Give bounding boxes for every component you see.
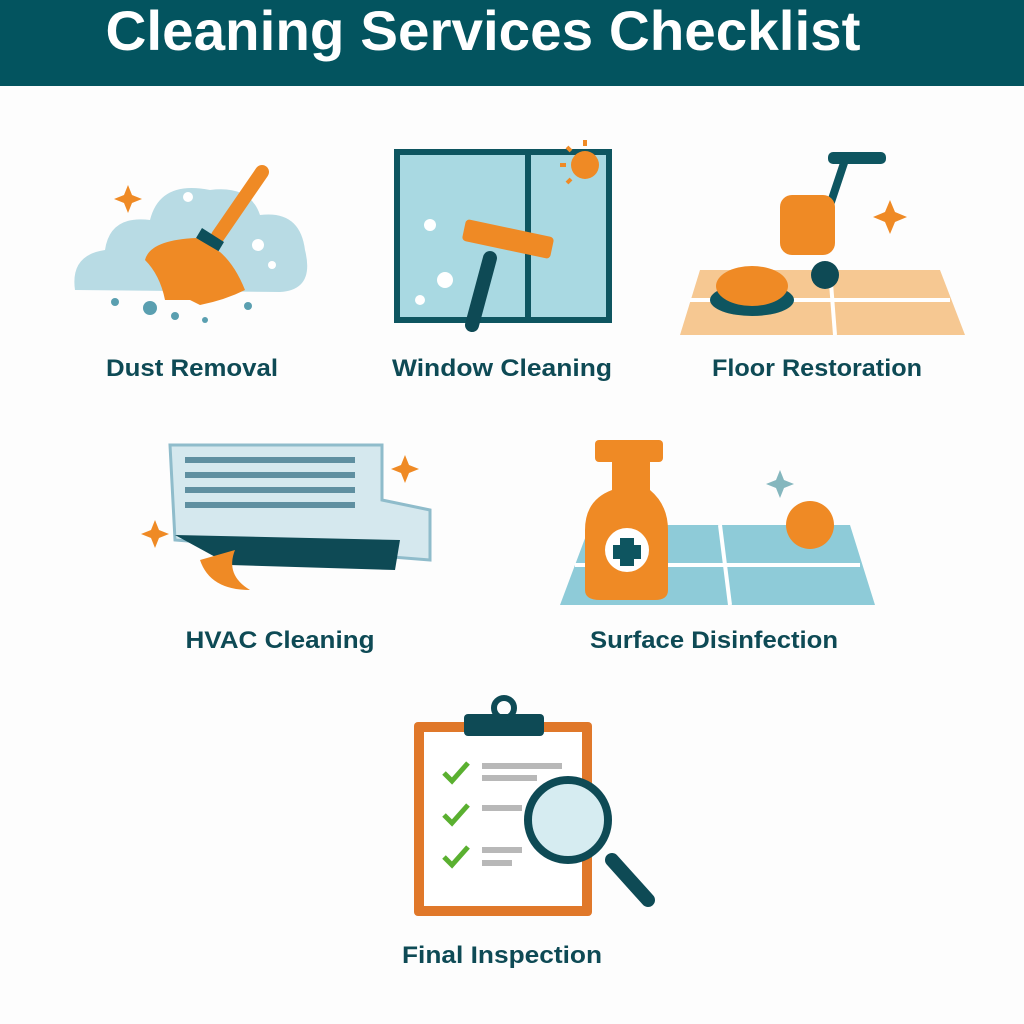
icon: floor restoration [680, 152, 965, 335]
icon: dust removal [74, 172, 307, 323]
icon: final inspection clipboard [414, 698, 648, 916]
icon: hvac [141, 445, 430, 590]
label: hvac: HVAC Cleaning [186, 627, 374, 654]
label: final inspection: Final Inspection [402, 942, 602, 969]
label: dust removal: Dust Removal [106, 355, 278, 382]
header band [0, 0, 1024, 86]
icon: window cleaning [397, 140, 609, 325]
label: floor restoration: Floor Restoration [712, 355, 922, 382]
icon: surface disinfection [560, 440, 875, 605]
label: window cleaning: Window Cleaning [392, 355, 612, 382]
title: Cleaning Services Checklist [106, 0, 860, 62]
label: surface disinfection: Surface Disinfection [590, 627, 838, 654]
